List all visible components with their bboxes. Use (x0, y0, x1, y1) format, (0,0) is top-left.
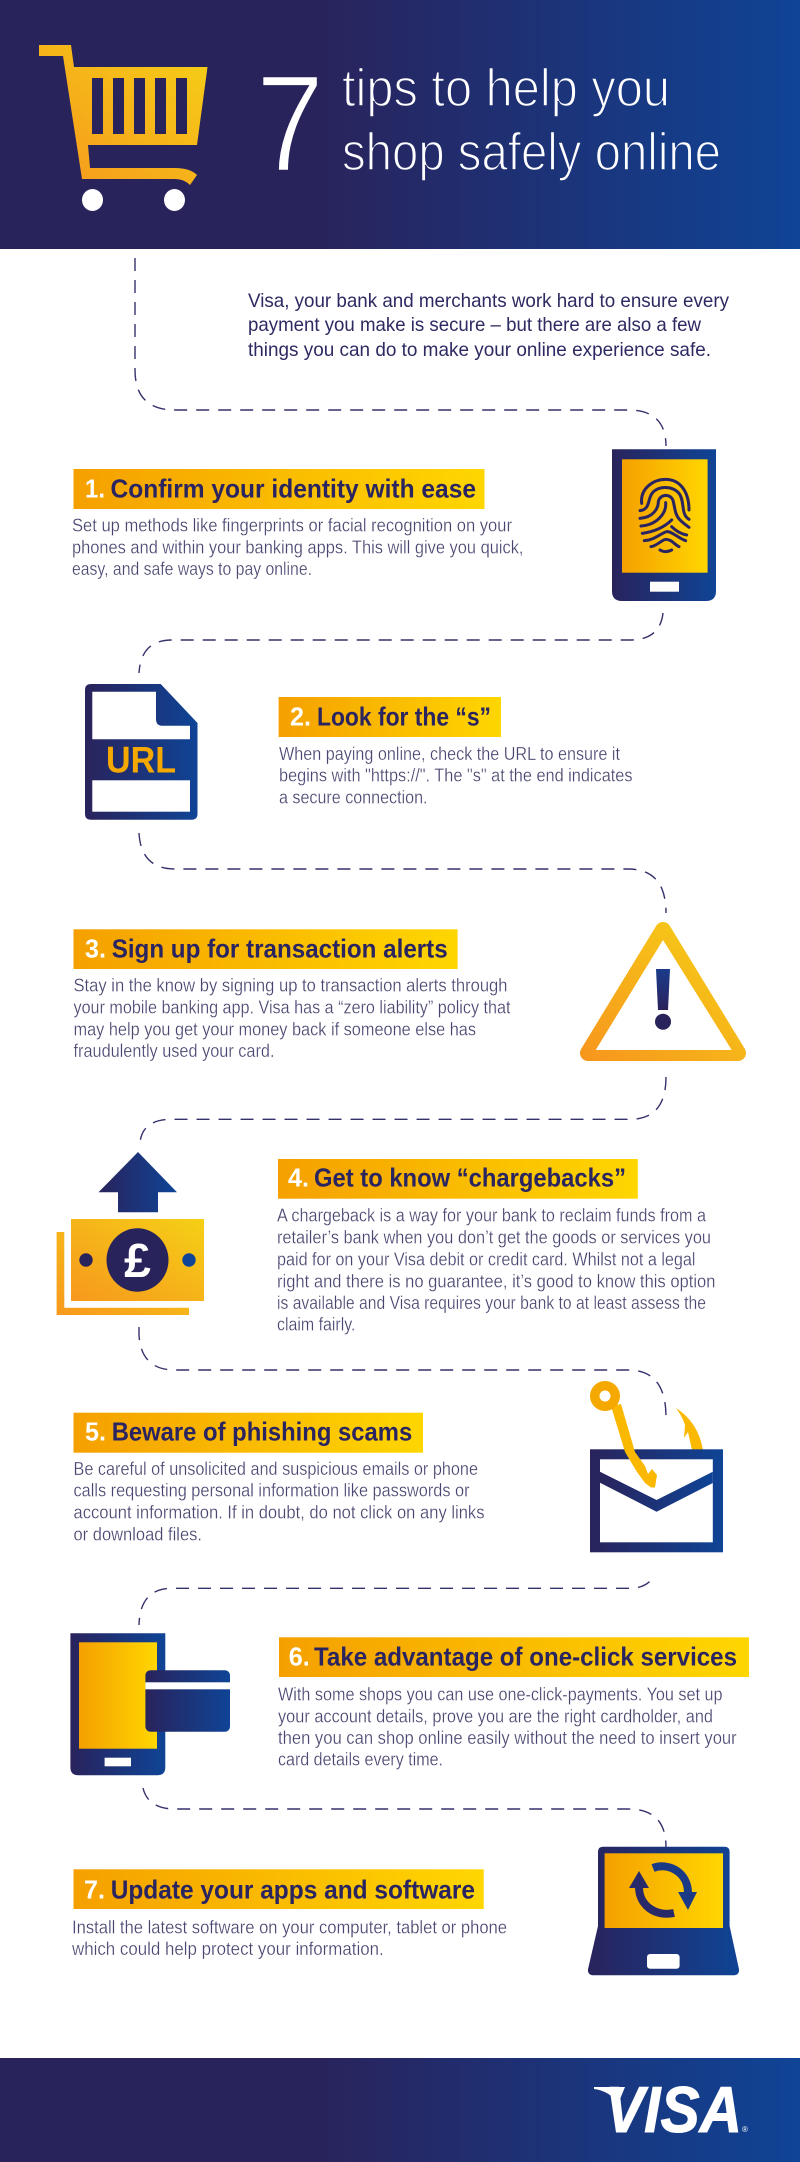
heading: tip 1 (74, 469, 484, 509)
title: shop safely online (342, 123, 721, 182)
dashed connector: tip 3 to tip 4 (140, 1077, 666, 1143)
heading: tip 7: Update your apps and software (111, 1875, 475, 1905)
dashed connector: header to tip 1 (135, 258, 666, 446)
dashed connector: tip 4 to tip 5 (139, 1327, 666, 1417)
text: tip 4 body: claim fairly. (277, 1315, 356, 1335)
heading: tip 4: 4. (288, 1163, 309, 1193)
text: tip 4 body: paid for on your Visa debit or credit card. Whilst not a legal (277, 1249, 696, 1269)
text: tip 5 body (74, 1459, 484, 1544)
panel: tip 4 (57, 1152, 716, 1335)
intro text: payment you make is secure – but there are also a few (248, 314, 702, 336)
title: 7 (256, 47, 324, 201)
panel: tip 1 (72, 449, 716, 601)
text: tip 4 body: A chargeback is a way for your bank to reclaim funds from a (277, 1206, 707, 1226)
heading: tip 4 (278, 1159, 638, 1199)
text: tip 6 body: card details every time. (278, 1750, 443, 1770)
text: tip 5 body: or download files. (74, 1524, 202, 1544)
text: tip 1 body: easy, and safe ways to pay online. (72, 559, 312, 579)
dashed connector: tip 2 to tip 3 (139, 833, 666, 913)
icon: banknote with up arrow (57, 1152, 204, 1315)
heading: tip 5 (74, 1413, 423, 1453)
intro text: things you can do to make your online experience safe. (248, 339, 711, 361)
text: tip 3 body: your mobile banking app. Visa has a “zero liability” policy that (74, 997, 510, 1017)
icon: phone with bank card (70, 1633, 230, 1775)
heading: tip 3: Sign up for transaction alerts (112, 933, 448, 963)
heading: tip 1: 1. (85, 474, 105, 504)
text: tip 4 body: right and there is no guarantee, it’s good to know this option (277, 1271, 716, 1291)
Visa logo: ® (742, 2125, 748, 2134)
dashed connector: tip 5 to tip 6 (139, 1582, 650, 1625)
panel: tip 5 (74, 1381, 723, 1552)
heading: tip 5: Beware of phishing scams (112, 1417, 412, 1447)
text: tip 3 body: fraudulently used your card. (74, 1041, 274, 1061)
panel: tip 2 (85, 684, 632, 820)
dashed connector: tip 1 to tip 2 (139, 613, 663, 673)
text: tip 3 body (74, 976, 510, 1061)
text: tip 6 body: your account details, prove you are the right cardholder, and (278, 1706, 713, 1726)
text: tip 4 body: is available and Visa requires your bank to at least assess the (277, 1293, 706, 1313)
heading: tip 7: 7. (84, 1875, 105, 1905)
heading: tip 5: 5. (85, 1417, 106, 1447)
text: tip 3 body: Stay in the know by signing up to transaction alerts through (74, 976, 508, 996)
title (256, 47, 721, 201)
icon: laptop with sync arrows (588, 1847, 739, 1975)
heading: tip 6: 6. (289, 1642, 310, 1672)
dashed connector: tip 6 to tip 7 (143, 1788, 666, 1847)
heading: tip 6: Take advantage of one-click services (314, 1642, 737, 1672)
heading: tip 3 (74, 929, 458, 969)
text: tip 7 body: Install the latest software on your computer, tablet or phone (72, 1917, 507, 1937)
text: tip 2 body: When paying online, check the URL to ensure it (279, 744, 620, 764)
heading: tip 2 (279, 697, 501, 737)
panel: tip 3 (74, 929, 738, 1061)
icon: URL document: URL (106, 740, 176, 781)
icon: banknote with up arrow: £ (124, 1235, 151, 1288)
footer banner (0, 2058, 800, 2162)
panel: tip 7 (71, 1847, 739, 1975)
text: tip 6 body: then you can shop online easily without the need to insert your (278, 1728, 737, 1748)
text: tip 4 body: retailer’s bank when you don’t get the goods or services you (277, 1227, 711, 1247)
text: tip 2 body (279, 744, 632, 807)
icon: URL document (85, 684, 198, 820)
heading: tip 1: Confirm your identity with ease (110, 474, 476, 504)
text: tip 5 body: calls requesting personal information like passwords or (74, 1481, 470, 1501)
text: tip 7 body (71, 1917, 507, 1959)
text: tip 4 body (277, 1206, 716, 1335)
text: tip 5 body: Be careful of unsolicited and suspicious emails or phone (74, 1459, 478, 1479)
icon: phone with fingerprint (612, 449, 716, 601)
panel: tip 6 (70, 1633, 749, 1775)
intro text: Visa, your bank and merchants work hard to ensure every (248, 290, 729, 312)
text: tip 7 body: which could help protect your information. (71, 1939, 384, 1959)
intro text (248, 290, 729, 361)
text: tip 2 body: a secure connection. (279, 787, 428, 807)
icon: phishing hook and envelope (590, 1381, 723, 1552)
text: tip 5 body: account information. If in doubt, do not click on any links (74, 1503, 484, 1523)
header banner (0, 0, 800, 249)
heading: tip 4: Get to know “chargebacks” (314, 1163, 626, 1193)
heading: tip 6 (279, 1637, 749, 1677)
text: tip 6 body: With some shops you can use one-click-payments. You set up (278, 1685, 722, 1705)
text: tip 3 body: may help you get your money back if someone else has (74, 1019, 476, 1039)
text: tip 1 body: phones and within your banking apps. This will give you quick, (72, 537, 524, 557)
heading: tip 2: 2. (290, 701, 311, 731)
heading: tip 7 (74, 1869, 484, 1909)
text: tip 1 body (72, 516, 524, 579)
text: tip 6 body (278, 1685, 737, 1770)
icon: shopping cart (39, 45, 208, 211)
title: tips to help you (342, 59, 670, 118)
heading: tip 2: Look for the “s” (317, 701, 491, 731)
heading: tip 3: 3. (85, 933, 106, 963)
Visa logo: VISA (605, 2073, 742, 2146)
icon: warning triangle (588, 930, 738, 1053)
text: tip 2 body: begins with "https://". The "s" at the end indicates (279, 766, 632, 786)
text: tip 1 body: Set up methods like fingerprints or facial recognition on your (72, 516, 512, 536)
